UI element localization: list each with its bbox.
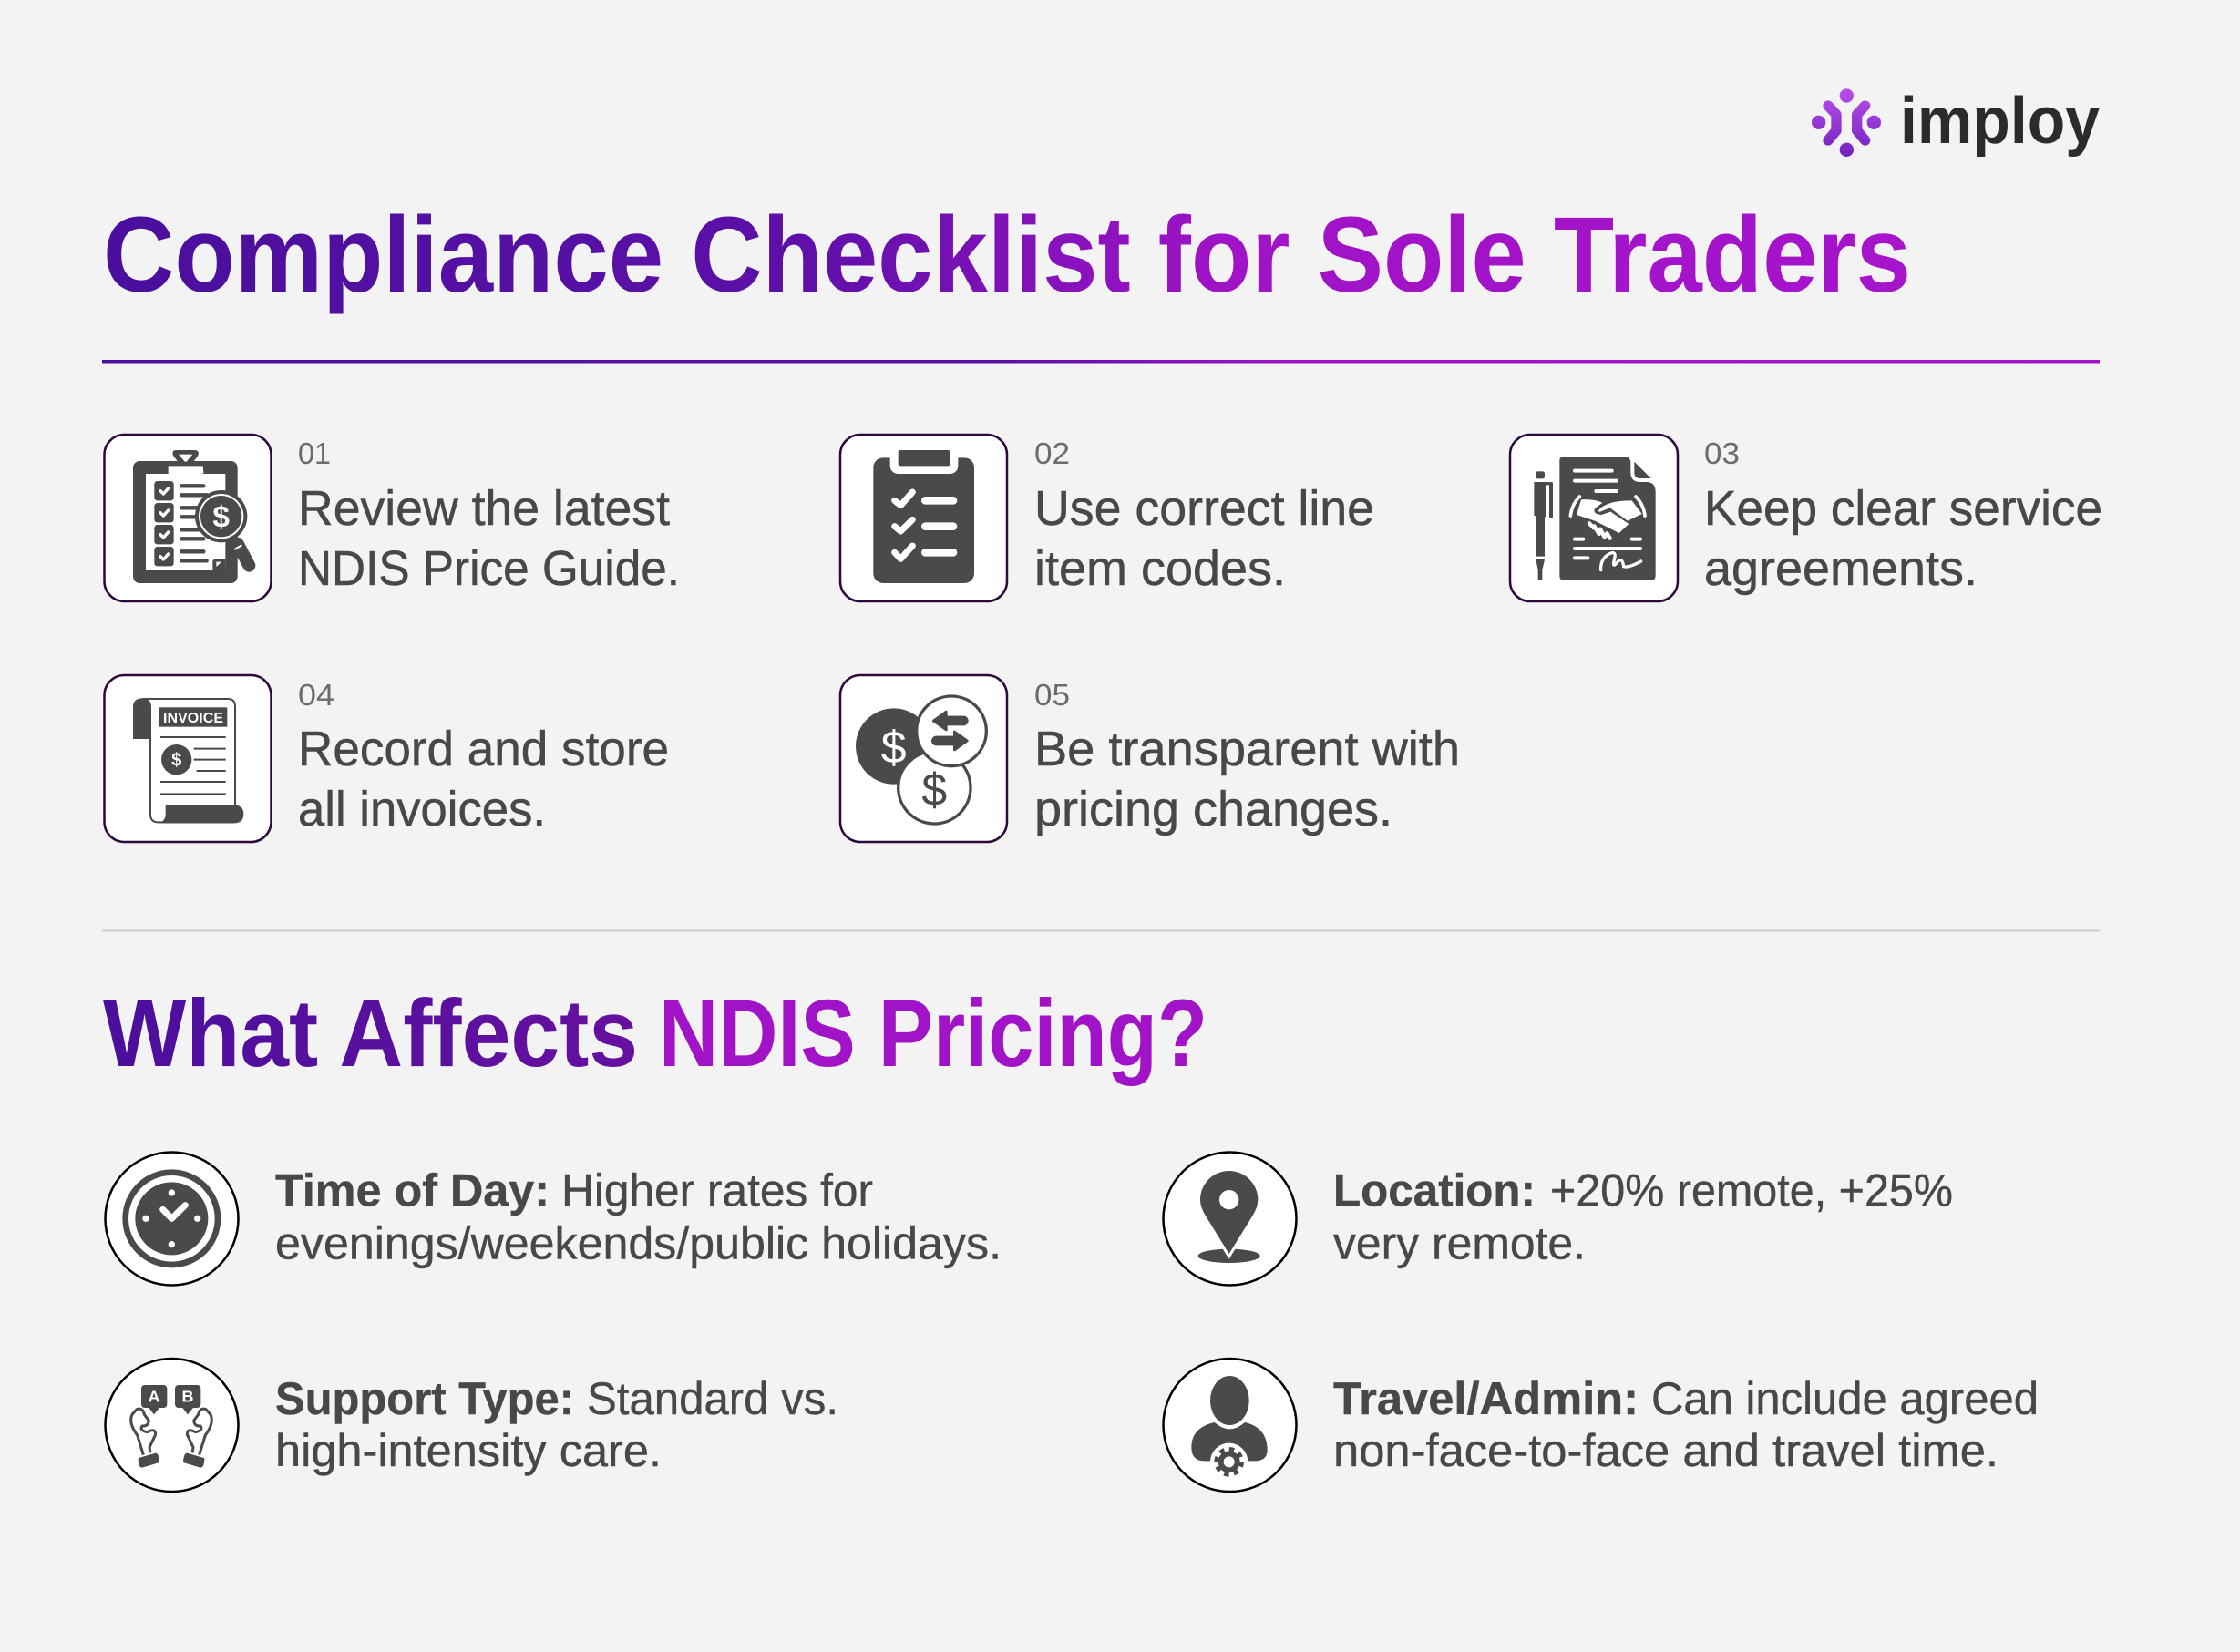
text: transparent pricing: Be transparent with [1034,722,1460,776]
text: support type: Support Type: [275,1373,574,1424]
checklist item 03 [1510,435,2102,601]
icon: clipboard with magnifier: $ [212,501,230,535]
text: service agreements: agreements. [1704,541,1978,596]
text: location: Location: [1333,1165,1536,1216]
icon: dollar exchange coins: $ [921,764,947,815]
title: Compliance Checklist for Sole Traders [103,195,1911,315]
heading: what affects NDIS pricing: What Affects [103,980,638,1087]
text: travel and admin [1333,1373,2039,1476]
text: record invoices: all invoices. [298,782,546,836]
icon: hands with A and B bubbles: A [148,1388,159,1406]
text: time of day [275,1165,1002,1268]
text: time of day: evenings/weekends/public holidays. [275,1217,1002,1268]
text: service agreements: Keep clear service [1704,481,2102,536]
icon: hands with A and B bubbles [131,1385,211,1467]
text: record invoices: Record and store [298,722,669,776]
text: location: very remote. [1333,1217,1586,1268]
text: review price guide: Review the latest [298,481,670,536]
text: support type: Standard vs. [587,1373,838,1424]
icon: hands with A and B bubbles: B [181,1388,193,1406]
text: line item codes: item codes. [1034,541,1286,596]
icon: invoice scroll [133,698,243,823]
text: record invoices [298,722,669,836]
text: transparent pricing: pricing changes. [1034,782,1392,836]
text: location: +20% remote, +25% [1550,1165,1953,1216]
icon: map pin [1198,1171,1260,1263]
number 05: 05 [1034,678,1070,712]
text: line item codes: Use correct line [1034,481,1374,536]
heading: what affects NDIS pricing: NDIS Pricing? [659,980,1207,1087]
text: review price guide [298,481,680,596]
factor: time of day [106,1152,1002,1285]
logo: imploy [1812,85,2100,158]
checklist item 05 [840,675,1460,842]
icon: clipboard with magnifier [133,450,249,583]
text: line item codes [1034,481,1374,596]
checklist item 02 [840,435,1374,601]
factor: location [1163,1152,1953,1285]
icon: person with gear [1191,1376,1268,1481]
heading: what affects NDIS pricing [103,980,1207,1087]
text: travel and admin: non-face-to-face and travel time. [1333,1425,1999,1476]
text: support type [275,1373,838,1476]
icon: invoice scroll: INVOICE [163,711,223,726]
logo: imploy: imploy [1900,85,2100,158]
text: service agreements [1704,481,2102,596]
number 02: 02 [1034,436,1070,470]
text: transparent pricing [1034,722,1460,836]
checklist item 01 [104,435,680,601]
text: travel and admin: Can include agreed [1651,1373,2039,1424]
text: support type: high-intensity care. [275,1425,662,1476]
text: location [1333,1165,1953,1268]
factor: support type [106,1359,838,1492]
text: review price guide: NDIS Price Guide. [298,541,680,596]
icon: service agreement with handshake and pen [1534,457,1656,580]
text: time of day: Higher rates for [561,1165,873,1216]
number 01: 01 [298,436,331,470]
text: travel and admin: Travel/Admin: [1333,1373,1639,1424]
factor: travel and admin [1163,1359,2039,1492]
icon: dollar exchange coins: $ [881,722,907,773]
number 03: 03 [1704,436,1740,470]
icon: clock [122,1169,221,1267]
icon: clipboard checklist [873,450,974,583]
text: time of day: Time of Day: [275,1165,550,1216]
icon: invoice scroll: $ [171,751,181,771]
icon: dollar exchange coins [856,696,986,824]
number 04: 04 [298,678,334,712]
checklist item 04 [104,675,669,842]
